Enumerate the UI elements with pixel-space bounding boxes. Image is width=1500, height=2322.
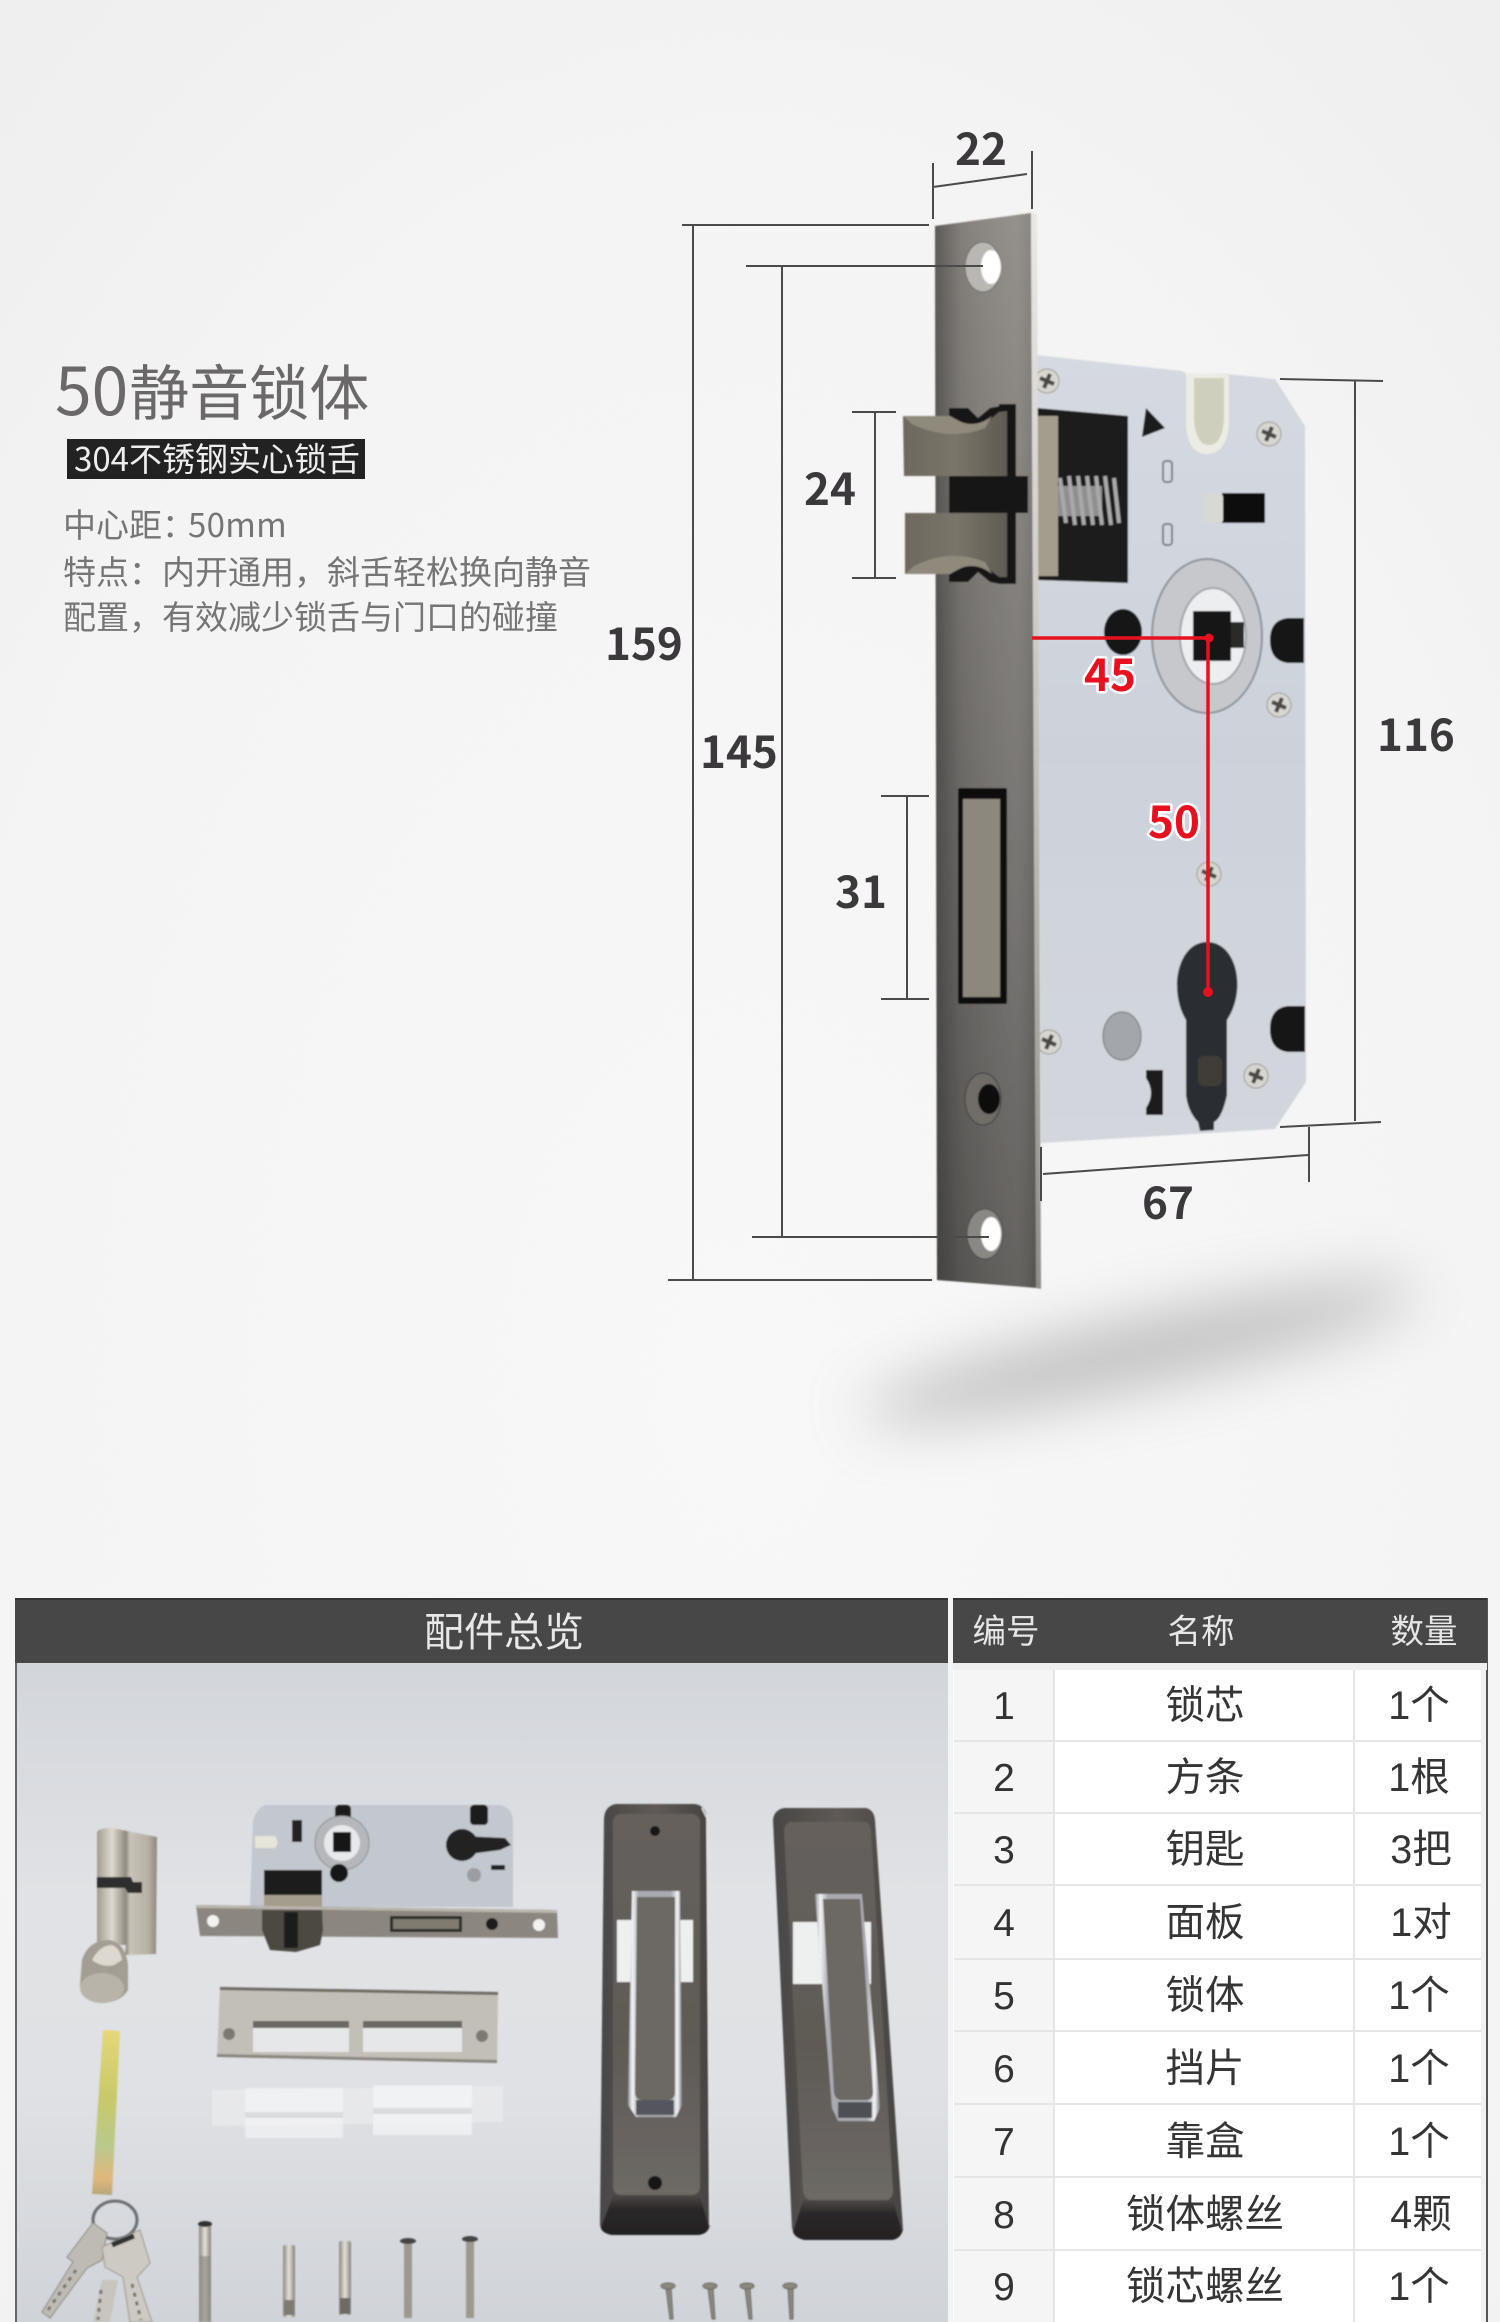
row 8: 锁体螺丝 (1126, 2183, 1284, 2240)
dimension 116: 116 (1377, 700, 1455, 764)
dimension 145: 145 (700, 717, 778, 781)
case screws (1035, 369, 1291, 1088)
long screw post (198, 2221, 212, 2322)
row 8 (993, 2183, 1452, 2240)
latch pocket (958, 788, 1007, 1004)
dimension 159 (605, 225, 932, 1280)
faceplate hole middle (965, 1073, 1001, 1125)
latch tongue (903, 404, 1028, 584)
dimension 67: 67 (1142, 1168, 1194, 1232)
faceplate (935, 213, 1041, 1289)
panel: parts table (948, 1598, 1488, 2322)
table background (948, 1598, 1488, 2322)
title: 50静音锁体 (55, 339, 369, 435)
row 7: 靠盒 (1166, 2110, 1244, 2167)
description text: 中心距：50mm (63, 499, 287, 547)
red dimension lines (1032, 634, 1214, 997)
row 6: 挡片 (1166, 2037, 1244, 2094)
row 1: 1个 (1388, 1684, 1450, 1728)
row 7: 1个 (1388, 2120, 1450, 2164)
row 2: 方条 (1166, 1746, 1244, 1803)
dimension 159: 159 (605, 609, 683, 673)
dimension 31: 31 (835, 857, 887, 921)
row 8: 4颗 (1390, 2193, 1452, 2237)
photo background (15, 1663, 948, 2322)
dimension 24 (804, 412, 896, 578)
short post 2 (339, 2241, 351, 2315)
handle panel right (773, 1808, 903, 2240)
table header: 数量 (1390, 1604, 1458, 1653)
row 5: 5 (993, 1975, 1015, 2018)
product shadow (855, 1259, 1425, 1445)
row 5: 锁体 (1166, 1964, 1244, 2021)
faceplate hole top (965, 242, 1001, 292)
row 9: 锁芯螺丝 (1126, 2255, 1284, 2312)
keys (42, 2223, 152, 2322)
photo items (42, 1804, 903, 2322)
spindle hub (1152, 559, 1262, 713)
plastic latch box (212, 2085, 503, 2138)
key ring (93, 2201, 137, 2239)
latch window (1037, 408, 1128, 583)
faceplate hole bottom (967, 1209, 1003, 1259)
row 3 (993, 1818, 1452, 1875)
panel: mortise lock body (903, 213, 1306, 1289)
red label 50: 50 (1148, 787, 1200, 851)
short post 1 (283, 2245, 295, 2317)
table grid lines (954, 1670, 1481, 2322)
row 3: 3把 (1390, 1828, 1452, 1872)
row 9: 1个 (1388, 2265, 1450, 2309)
row 3: 3 (993, 1829, 1015, 1872)
machine screw 1 (400, 2238, 416, 2318)
row 6: 1个 (1388, 2047, 1450, 2091)
latch carrier (1037, 416, 1058, 576)
row 3: 钥匙 (1166, 1818, 1244, 1875)
small notch (1146, 1070, 1163, 1115)
row 1: 锁芯 (1166, 1674, 1244, 1731)
dimension 22: 22 (955, 114, 1007, 178)
row 4 (993, 1891, 1452, 1948)
badge: 304 stainless steel: 304不锈钢实心锁舌 (74, 433, 360, 481)
side slot lower (1270, 1006, 1305, 1052)
row 5 (993, 1964, 1450, 2021)
row 8: 8 (993, 2194, 1015, 2237)
dimension 67 (1041, 1127, 1309, 1232)
row 2: 2 (993, 1757, 1015, 1800)
triangular hole (1142, 408, 1165, 437)
row 7: 7 (993, 2121, 1015, 2164)
header bar: 配件总览 (424, 1600, 584, 1658)
row 4: 4 (993, 1902, 1015, 1945)
row 4: 面板 (1166, 1891, 1244, 1948)
lock case plate (1037, 355, 1306, 1143)
side slot upper (1270, 618, 1304, 663)
red label 45: 45 (1084, 640, 1136, 704)
row 2: 1根 (1388, 1756, 1450, 1800)
table header: 名称 (1168, 1604, 1234, 1653)
table header: 编号 (972, 1604, 1040, 1653)
dimension 22 (933, 114, 1032, 219)
row 6: 6 (993, 2048, 1015, 2091)
description text: 特点：内开通用，斜舌轻松换向静音 (63, 546, 591, 594)
handle panel left (600, 1804, 710, 2235)
row 9 (993, 2255, 1450, 2312)
row 9: 9 (993, 2266, 1015, 2309)
plastic latch guide (1186, 373, 1229, 454)
lock cylinder (80, 1828, 157, 2003)
spindle bar (92, 2030, 120, 2195)
spring (1058, 476, 1119, 525)
table header (953, 1598, 1487, 1663)
dimension 24: 24 (804, 454, 856, 518)
header bar (15, 1598, 948, 1663)
panel: accessories overview photo (15, 1598, 948, 2322)
strike plate (217, 1987, 498, 2063)
small slots (1163, 461, 1172, 545)
row 1 (993, 1674, 1450, 1731)
description text (63, 499, 591, 639)
row 5: 1个 (1388, 1974, 1450, 2018)
row 2 (993, 1746, 1450, 1803)
row 1: 1 (993, 1685, 1015, 1728)
row 6 (993, 2037, 1450, 2094)
dimension 145 (700, 266, 989, 1237)
round hole (1104, 609, 1142, 655)
dimension 116 (1280, 379, 1455, 1127)
cylinder keyhole (1177, 942, 1237, 1131)
small mortise lock (196, 1805, 558, 1952)
row 4: 1对 (1390, 1901, 1452, 1945)
machine screw 2 (462, 2236, 478, 2318)
dimension 31 (835, 796, 929, 999)
round plug (1103, 1012, 1141, 1060)
row 7 (993, 2110, 1450, 2167)
description text: 配置，有效减少锁舌与门口的碰撞 (63, 591, 558, 639)
small wood screws (661, 2283, 797, 2319)
rectangular slot (1203, 493, 1265, 523)
